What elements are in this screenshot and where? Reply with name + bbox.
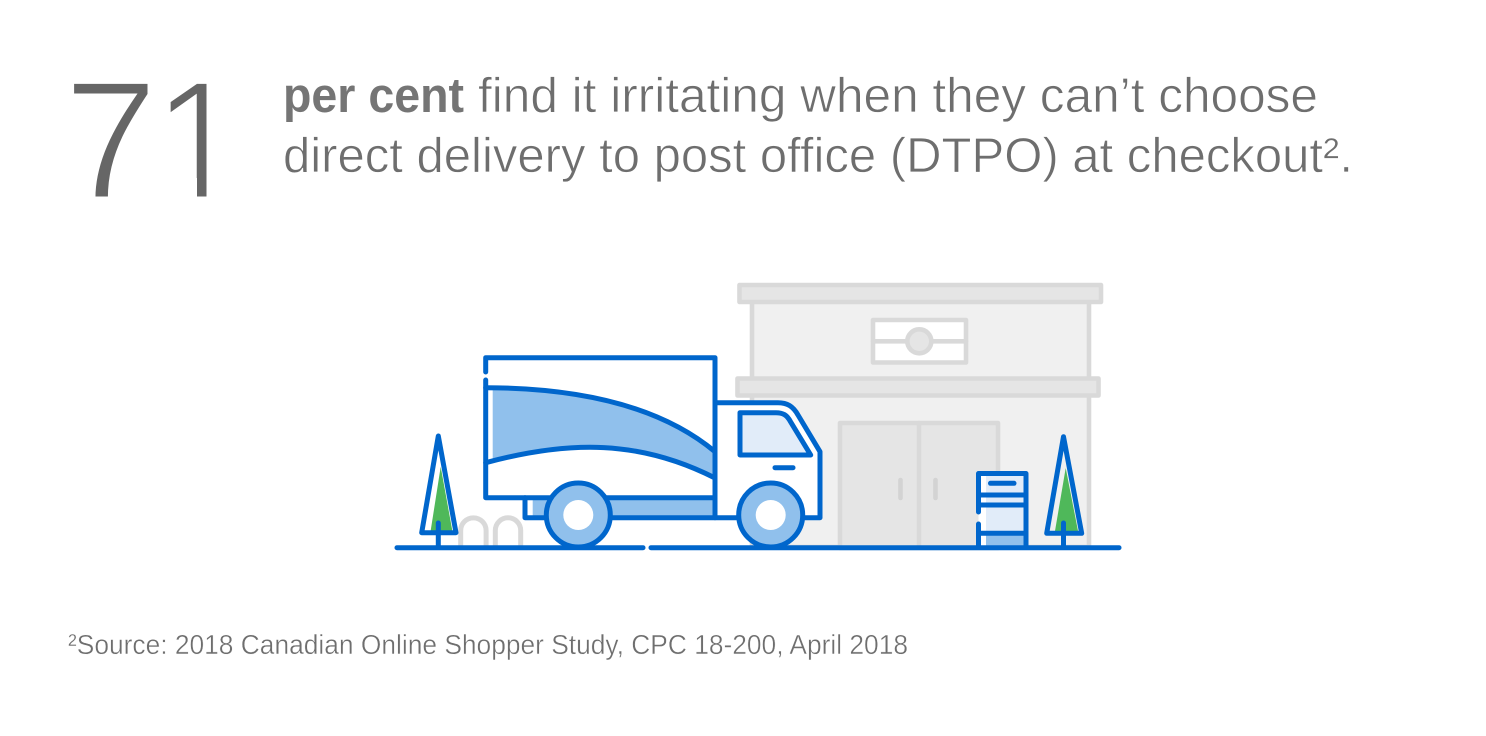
big number 71: 7 [64,46,157,234]
front wheel [739,483,803,547]
cab window [740,413,811,455]
big number 71 [74,84,206,196]
building wall [752,300,1089,547]
cargo box outline [486,358,715,498]
big number 71: 1 [153,46,246,234]
source footnote: ²Source: 2018 Canadian Online Shopper Study, CPC 18-200, April 2018 [68,629,908,660]
headline bold: per cent: per cent [283,69,464,123]
cargo swoosh fill [493,388,715,478]
bike rack hoops [461,518,521,547]
cab [715,403,820,518]
cargo box [486,358,715,498]
door handle [775,465,793,470]
delivery truck [486,358,820,547]
headline text [283,69,1353,183]
double doors [840,423,998,548]
right tree [1047,437,1082,547]
left tree [422,436,456,547]
sign with emblem [873,320,966,362]
swoosh outlines [486,388,715,478]
illustration: post office building [738,285,1101,548]
roof band [740,285,1101,302]
headline line 2: direct delivery to post office (DTPO) at checkout². [283,129,1353,183]
middle band [738,378,1098,396]
headline line 1: find it irritating when they can’t choose [478,69,1318,123]
chassis [525,498,715,518]
mailbox [978,473,1026,548]
rear wheel [546,483,610,547]
ground line [397,545,1119,550]
